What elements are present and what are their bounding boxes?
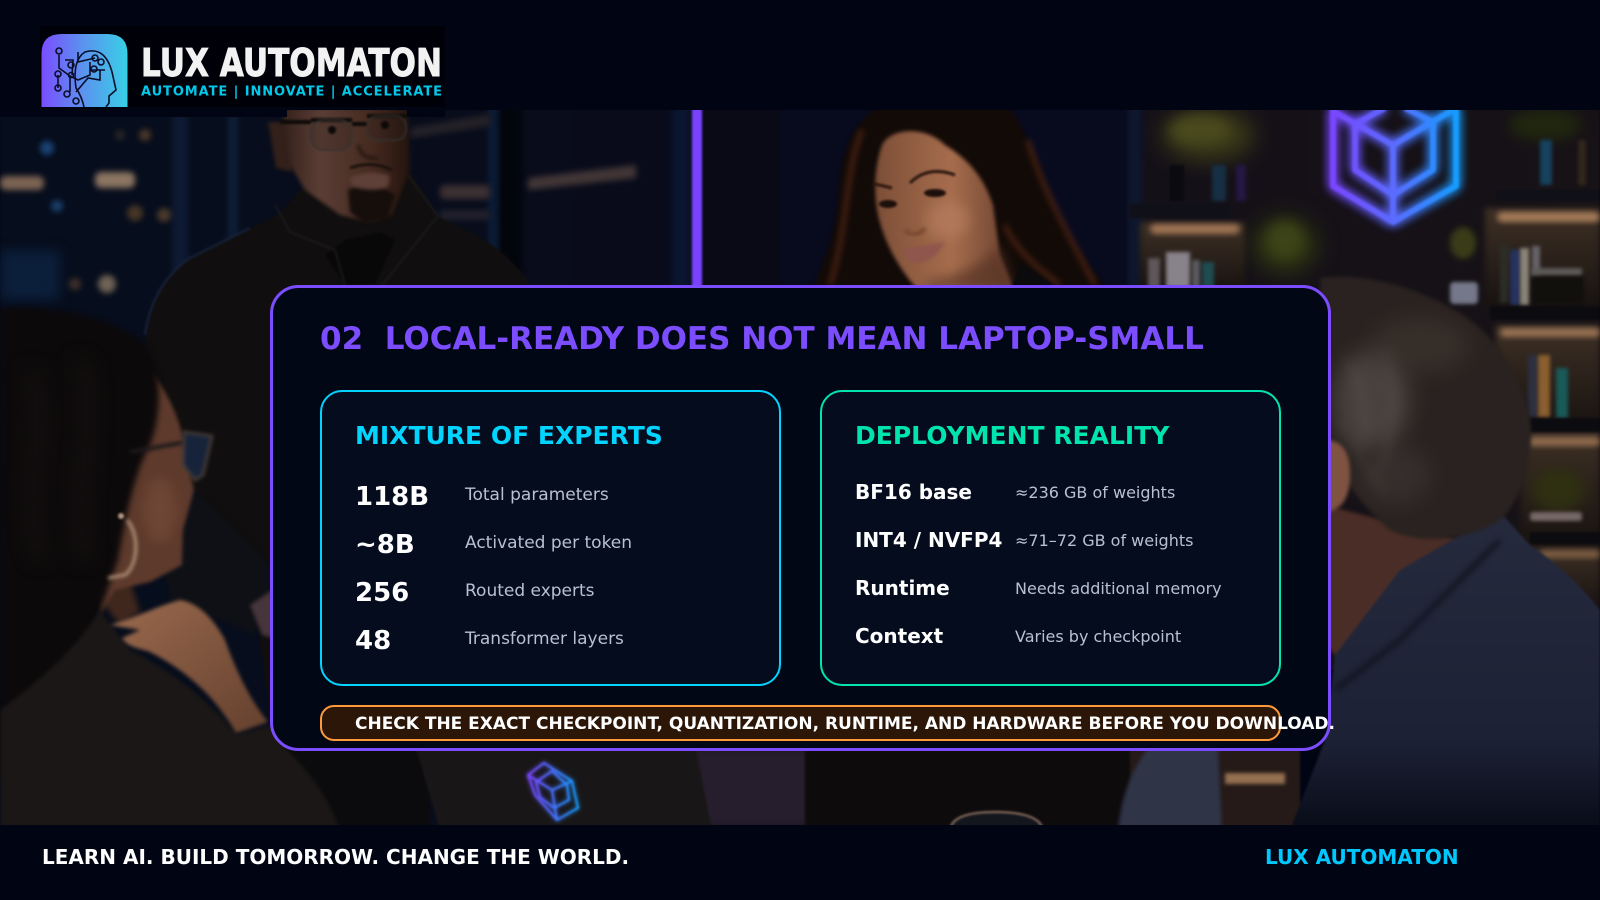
stat: transformer layers: Transformer layers — [464, 629, 624, 649]
card heading: DEPLOYMENT REALITY — [855, 421, 1170, 450]
row: BF16 base: BF16 base — [855, 480, 972, 504]
row: context: Varies by checkpoint — [1015, 627, 1181, 646]
callout: check before download: CHECK THE EXACT CHECKPOINT, QUANTIZATION, RUNTIME, AND HARDWARE BEFORE YOU DOWNLOAD. — [355, 714, 1335, 734]
stat: routed experts: 256 — [355, 578, 409, 608]
bottom brand band — [0, 825, 1600, 900]
panel title: 02 LOCAL-READY DOES NOT MEAN LAPTOP-SMALL — [320, 321, 1204, 357]
card: deployment reality — [821, 391, 1280, 685]
card: mixture of experts — [321, 391, 780, 685]
row: runtime: Runtime — [855, 576, 950, 600]
purple neon pillar — [692, 100, 702, 290]
stat: activated per token: ~8B — [355, 530, 415, 560]
row: BF16 base: ≈236 GB of weights — [1015, 483, 1175, 502]
main panel — [272, 286, 1335, 750]
footer tagline: LEARN AI. BUILD TOMORROW. CHANGE THE WORLD. — [42, 845, 629, 869]
laptop with small cube logo — [326, 751, 806, 825]
stat: routed experts: Routed experts — [465, 581, 595, 601]
stat: total parameters — [355, 482, 609, 512]
callout: check before download — [321, 706, 1335, 740]
stat: total parameters: Total parameters — [464, 485, 609, 505]
row: INT4 / NVFP4: INT4 / NVFP4 — [855, 528, 1002, 552]
footer brand name: LUX AUTOMATON — [1265, 845, 1459, 869]
band overhang under logo — [0, 110, 445, 117]
city lights bokeh — [0, 114, 636, 300]
stat: transformer layers — [355, 626, 624, 656]
stat: activated per token: Activated per token — [465, 533, 632, 553]
foreground man seen from behind — [1290, 277, 1600, 830]
row: runtime — [855, 576, 1222, 600]
bookshelves — [1130, 109, 1600, 608]
neon cube on the wall — [1333, 108, 1456, 222]
logo wordmark: LUX AUTOMATON — [141, 41, 442, 85]
stat: total parameters: 118B — [355, 482, 429, 512]
row: context: Context — [855, 624, 944, 648]
row: INT4 / NVFP4 — [855, 528, 1193, 552]
stat: transformer layers: 48 — [355, 626, 391, 656]
logo icon: circuit head — [42, 34, 128, 107]
standing man in black jacket — [144, 110, 530, 716]
smiling woman with long hair — [812, 105, 1108, 290]
seated woman's dark clothes and mug — [804, 751, 1301, 825]
row: runtime: Needs additional memory — [1015, 579, 1222, 598]
logo tagline: AUTOMATE | INNOVATE | ACCELERATE — [141, 84, 442, 100]
top brand band — [0, 0, 1600, 110]
row: context — [855, 624, 1181, 648]
row: INT4 / NVFP4: ≈71–72 GB of weights — [1015, 531, 1193, 550]
stat: activated per token — [355, 530, 632, 560]
row: BF16 base — [855, 480, 1175, 504]
card heading: MIXTURE OF EXPERTS — [355, 421, 663, 450]
stat: routed experts — [355, 578, 595, 608]
logo — [40, 26, 445, 107]
foreground woman with glasses and hoop earring — [0, 307, 340, 830]
